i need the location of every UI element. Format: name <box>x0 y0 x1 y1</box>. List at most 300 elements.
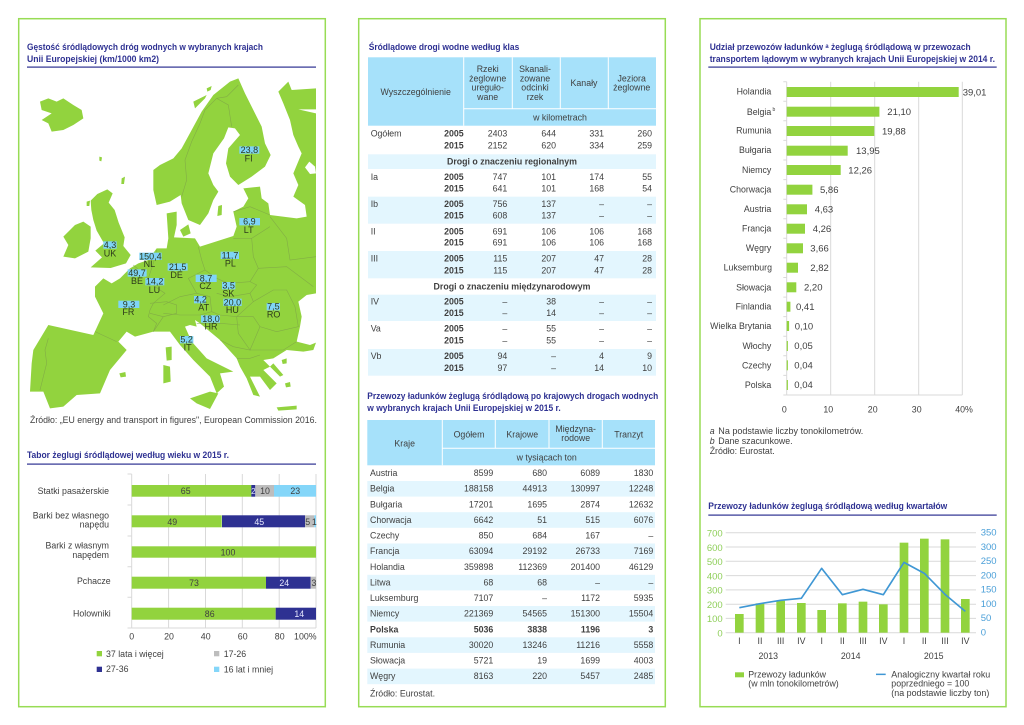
chart: fleet age stacked bars: napędu <box>80 520 109 530</box>
map values: RO <box>267 310 280 320</box>
map values: 49,7 <box>128 268 146 278</box>
chart: share by country bars: 12,26 <box>848 166 872 176</box>
table: freight by country: Krajowe <box>506 429 538 439</box>
chart: quarterly freight bars and line: I <box>820 636 823 646</box>
table: waterways by class: 691 <box>493 226 507 236</box>
table: freight by country: 2485 <box>634 671 653 681</box>
chart: share by country bars: 3,66 <box>810 244 829 255</box>
table: waterways by class: – <box>647 336 652 346</box>
chart: quarterly freight bars and line: 400 <box>707 571 723 582</box>
chart: fleet age stacked bars: 1 <box>312 517 317 527</box>
table: waterways by class: 207 <box>541 265 556 275</box>
table: freight by country: Luksemburg <box>370 593 419 603</box>
map values: 23,8 <box>241 145 258 155</box>
table: waterways by class: wane <box>476 92 498 102</box>
chart: share by country bars: 0,10 <box>795 321 813 332</box>
chart: share by country bars: 5,86 <box>820 185 838 196</box>
table: freight by country: – <box>648 577 653 587</box>
table: waterways by class: 97 <box>498 363 507 373</box>
chart: share by country bars: 39,01 <box>963 88 986 98</box>
chart: quarterly freight bars and line: III <box>777 636 784 646</box>
table: freight by country: 7169 <box>634 546 653 556</box>
table: freight by country: Bułgaria <box>370 499 402 509</box>
table: freight by country: 850 <box>479 530 493 540</box>
table: freight by country: Kraje <box>394 438 415 448</box>
table: waterways by class: – <box>599 308 604 318</box>
chart: share by country bars: 2,20 <box>804 283 822 294</box>
map: Europe with density values <box>30 78 316 411</box>
chart: fleet age stacked bars: 14 <box>294 609 304 619</box>
table: waterways by class: 2015 <box>444 141 464 151</box>
legend: fleet age <box>97 649 273 674</box>
table: freight by country: 5935 <box>634 593 653 603</box>
table: waterways by class: Ogółem <box>371 129 402 139</box>
table: freight by country: 13246 <box>523 640 547 650</box>
legend: quarterly chart: Analogiczny kwartał roku <box>891 669 990 679</box>
table: freight by country: Międzyna- <box>555 424 596 434</box>
table: waterways by class: – <box>502 324 507 334</box>
chart: quarterly freight bars and line: 500 <box>707 557 723 568</box>
chart: share by country bars: 21,10 <box>887 107 911 118</box>
table: waterways by class: III <box>371 254 378 264</box>
map values <box>103 145 280 352</box>
chart: quarterly freight bars and line: II <box>758 636 762 646</box>
panel: left column <box>19 19 325 707</box>
table: waterways by class: 2403 <box>488 129 507 139</box>
table: freight by country: 11216 <box>576 640 600 650</box>
table: waterways by class: 2005 <box>444 199 464 209</box>
table: freight by country: Holandia <box>370 562 405 572</box>
table: freight by country: 5457 <box>580 671 600 681</box>
table: waterways by class: – <box>647 324 652 334</box>
heading: freight by country: Przewozy ładunków żeglugą śródlądową po krajowych drogach wodnych <box>367 391 658 401</box>
table: freight by country: 6642 <box>474 515 493 525</box>
table: waterways by class: – <box>502 336 507 346</box>
table: waterways by class: 174 <box>589 172 604 182</box>
table: freight by country: 359898 <box>464 562 493 572</box>
heading: waterway density map <box>27 42 316 68</box>
table: waterways by class: Ia <box>371 172 378 182</box>
table: freight by country: Litwa <box>370 577 391 587</box>
chart: quarterly freight bars and line: 50 <box>981 613 991 624</box>
chart: quarterly freight bars and line: III <box>859 636 867 646</box>
chart: fleet age stacked bars: 65 <box>181 486 191 496</box>
table: waterways by class: 644 <box>541 129 556 139</box>
table: freight by country: 51 <box>537 515 547 525</box>
table: waterways by class: 641 <box>493 184 507 194</box>
map values: 4,2 <box>194 295 207 305</box>
table: waterways by class: odcinki <box>521 82 549 92</box>
chart: share by country bars: 2,82 <box>810 263 829 274</box>
map values: 14,2 <box>146 277 163 287</box>
chart: quarterly freight bars and line: I <box>903 636 905 646</box>
legend: quarterly chart: (na podstawie liczby ton) <box>891 688 989 698</box>
table: freight by country: 3 <box>648 624 653 634</box>
table: freight by country: 8599 <box>474 468 493 478</box>
chart: share by country bars: Chorwacja <box>730 184 771 194</box>
legend: quarterly chart: (w mln tonokilometrów) <box>748 679 839 689</box>
table: freight by country: 29192 <box>523 546 547 556</box>
table: freight by country: Polska <box>370 624 398 634</box>
table: freight by country: 7107 <box>474 593 493 603</box>
table: waterways by class: – <box>551 363 556 373</box>
table: waterways by class: 106 <box>541 238 556 248</box>
chart: share by country bars: 4,26 <box>813 224 831 235</box>
chart: quarterly freight bars and line: II <box>922 636 927 646</box>
text: table source: Źródło: Eurostat. <box>370 688 435 698</box>
table: waterways by class: 9 <box>647 351 652 361</box>
chart: quarterly freight bars and line <box>707 528 997 661</box>
table: waterways by class: 2015 <box>444 210 464 220</box>
map values: UK <box>104 248 116 258</box>
heading: share of inland shipping <box>708 42 997 68</box>
map values: IT <box>184 342 192 352</box>
table: freight by country: 17201 <box>469 499 493 509</box>
chart: share by country bars: Czechy <box>742 360 772 370</box>
legend: fleet age: 27-36 <box>106 664 129 674</box>
chart: fleet age stacked bars: 100% <box>294 632 317 642</box>
table: waterways by class: 28 <box>642 265 652 275</box>
chart: share by country bars: 40% <box>955 404 973 414</box>
table: waterways by class: Va <box>371 324 381 334</box>
map values: 9,3 <box>123 299 135 309</box>
table: freight by country: 201400 <box>571 562 600 572</box>
table: freight by country: 12248 <box>629 484 653 494</box>
chart: quarterly freight bars and line: IV <box>961 636 970 646</box>
table: freight by country: 5721 <box>474 656 493 666</box>
chart: share by country bars: 13,95 <box>856 146 880 157</box>
table: waterways by class: Ib <box>371 199 378 209</box>
table: freight by country: 188158 <box>464 484 493 494</box>
table: freight by country: 4003 <box>634 656 653 666</box>
chart: fleet age stacked bars: Holowniki <box>73 608 111 618</box>
table: waterways by class: 55 <box>546 324 556 334</box>
chart: quarterly freight bars and line: 350 <box>981 528 997 538</box>
chart: quarterly freight bars and line: IV <box>879 636 888 646</box>
table: waterways by class: 608 <box>493 210 507 220</box>
table: waterways by class: 2152 <box>488 141 507 151</box>
chart: share by country bars: b <box>772 107 776 113</box>
table: waterways by class: Rzeki <box>477 64 499 74</box>
chart: fleet age stacked bars: 80 <box>275 632 285 642</box>
map values: 4,3 <box>104 240 116 250</box>
table: waterways by class: – <box>647 199 652 209</box>
table: waterways by class: 620 <box>541 141 556 151</box>
chart: quarterly freight bars and line: 0 <box>981 628 986 638</box>
map values: PL <box>225 258 236 268</box>
chart: quarterly freight bars and line: 200 <box>707 600 723 611</box>
chart: quarterly freight bars and line: I <box>738 636 741 646</box>
table: waterways by class: Wyszczególnienie <box>381 87 451 97</box>
table: waterways by class: 137 <box>541 210 556 220</box>
heading: waterway density map: Unii Europejskiej (km/1000 km2) <box>27 54 159 64</box>
panel: right column <box>700 19 1006 707</box>
chart: fleet age stacked bars: napędem <box>72 550 109 560</box>
chart: share by country bars: 4,63 <box>815 205 833 216</box>
table: waterways by class: – <box>599 336 604 346</box>
table: freight by country: Austria <box>370 468 397 478</box>
map values: DE <box>170 270 183 280</box>
table: waterways by class: – <box>647 308 652 318</box>
table: waterways by class: – <box>599 324 604 334</box>
table: waterways by class: 137 <box>541 199 556 209</box>
text: chart notes: Źródło: Eurostat. <box>710 446 775 456</box>
table: waterways by class: 168 <box>589 184 604 194</box>
text: chart notes <box>710 426 863 456</box>
map values: LT <box>244 225 254 235</box>
chart: share by country bars: 10 <box>823 404 833 414</box>
table: freight by country: 68 <box>484 577 493 587</box>
table: freight by country: 1695 <box>527 499 547 509</box>
chart: fleet age stacked bars: Statki pasażerskie <box>38 486 109 496</box>
table: waterways by class: Drogi o znaczeniu regionalnym <box>447 156 577 166</box>
table: freight by country: Chorwacja <box>370 515 412 525</box>
map values: 150,4 <box>139 251 162 261</box>
table: freight by country: 1172 <box>581 593 600 603</box>
table: waterways by class: 691 <box>493 238 507 248</box>
chart: share by country bars: 0,04 <box>794 360 813 371</box>
heading: freight by quarter: Przewozy ładunków żeglugą śródlądową według kwartałów <box>708 501 948 511</box>
table: freight by country: – <box>595 577 600 587</box>
table: waterways by class: 14 <box>594 363 604 373</box>
table: freight by country: 6076 <box>634 515 653 525</box>
legend: fleet age: 16 lat i mniej <box>224 664 273 674</box>
map values: FR <box>122 307 135 317</box>
table: freight by country: 2874 <box>580 499 600 509</box>
chart: share by country bars: 30 <box>912 404 922 414</box>
table: waterways by class: 259 <box>637 141 652 151</box>
table: waterways by class: Jeziora <box>618 73 646 83</box>
table: freight by country: 221369 <box>464 609 493 619</box>
table: freight by country: 19 <box>537 656 547 666</box>
heading: share of inland shipping: transportem lądowym w wybranych krajach Unii Europejskiej w 2014 r. <box>710 54 995 64</box>
legend: quarterly chart: poprzedniego = 100 <box>891 679 969 689</box>
table: waterways by class: 28 <box>642 254 652 264</box>
chart: share by country bars: Holandia <box>737 86 771 96</box>
table: waterways by class: 94 <box>498 351 507 361</box>
table: freight by country: 515 <box>585 515 600 525</box>
legend: fleet age: 37 lata i więcej <box>106 649 164 659</box>
chart: quarterly freight bars and line: 2014 <box>841 651 861 661</box>
text: chart notes: b <box>710 436 715 446</box>
map values: AT <box>198 303 210 313</box>
map values: 11,7 <box>222 250 238 260</box>
legend: quarterly chart: Przewozy ładunków <box>748 669 827 679</box>
table: freight by country: Tranzyt <box>614 429 644 439</box>
table: waterways by class: 2005 <box>444 129 464 139</box>
chart: fleet age stacked bars: 73 <box>189 578 199 588</box>
table: freight by country: 12632 <box>629 499 653 509</box>
table: freight by country: – <box>648 530 653 540</box>
table: waterways by class: 47 <box>594 254 604 264</box>
table: waterways by class: – <box>551 351 556 361</box>
table: freight by country: 30020 <box>469 640 493 650</box>
table: freight by country: Francja <box>370 546 399 556</box>
table: freight by country: 684 <box>532 530 547 540</box>
table: waterways by class: 2005 <box>444 172 464 182</box>
table: waterways by class: 106 <box>541 226 556 236</box>
table: waterways by class: 756 <box>493 199 507 209</box>
chart: share by country bars: Słowacja <box>736 282 771 292</box>
table: waterways by class: 115 <box>493 254 507 264</box>
map values: 6,9 <box>243 217 256 227</box>
table: waterways by class: 2005 <box>444 351 464 361</box>
table: waterways by class: 47 <box>594 265 604 275</box>
table: freight by country: 1830 <box>634 468 653 478</box>
map values: HU <box>226 305 239 315</box>
text: chart notes: a <box>710 426 715 436</box>
table: waterways by class: Vb <box>371 351 382 361</box>
table: waterways by class: 10 <box>642 363 652 373</box>
chart: fleet age stacked bars: 10 <box>260 486 270 496</box>
table: waterways by class: Kanały <box>571 78 598 88</box>
map values: 20,0 <box>224 297 241 307</box>
chart: fleet age stacked bars: Barki z własnym <box>45 541 109 551</box>
table: freight by country: 130997 <box>571 484 600 494</box>
table: waterways by class: 106 <box>589 238 604 248</box>
table: freight by country: 3838 <box>527 624 547 634</box>
table: waterways by class: 14 <box>546 308 556 318</box>
table: waterways by class: – <box>502 308 507 318</box>
map values: 21,5 <box>169 262 186 272</box>
chart: fleet age stacked bars: 100 <box>221 548 235 558</box>
table: freight by country: 1196 <box>581 624 600 634</box>
table: waterways by class: zowane <box>520 73 550 83</box>
table: freight by country: 1699 <box>580 656 600 666</box>
table: freight by country: 63094 <box>469 546 493 556</box>
table: freight by country: 15504 <box>629 609 653 619</box>
map values: NL <box>144 259 155 269</box>
table: freight by country: Słowacja <box>370 656 405 666</box>
table: waterways by class: 2005 <box>444 296 464 306</box>
chart: fleet age stacked bars: Barki bez własnego <box>33 511 109 521</box>
chart: share by country bars: 19,88 <box>882 126 906 138</box>
table: waterways by class: – <box>647 210 652 220</box>
table: waterways by class: – <box>599 210 604 220</box>
table: freight by country: 46129 <box>629 562 653 572</box>
chart: fleet age stacked bars: 20 <box>164 632 174 642</box>
table: freight by country: 112369 <box>518 562 547 572</box>
chart: share by country bars: Wielka Brytania <box>710 321 771 331</box>
chart: fleet age stacked bars <box>33 474 317 642</box>
table: waterways by class: 2015 <box>444 336 464 346</box>
chart: quarterly freight bars and line: II <box>840 636 845 646</box>
chart: fleet age stacked bars: 49 <box>167 517 177 527</box>
table: waterways by class: 331 <box>589 129 604 139</box>
chart: quarterly freight bars and line: 300 <box>707 586 723 597</box>
table: freight by country: 5036 <box>474 624 493 634</box>
table: freight by country: 680 <box>532 468 547 478</box>
heading: freight by country <box>366 391 658 413</box>
table: freight by country: rodowe <box>561 433 590 443</box>
table: waterways by class: Drogi o znaczeniu międzynarodowym <box>434 282 591 292</box>
table: freight by country: 6089 <box>580 468 600 478</box>
table: waterways by class: 115 <box>493 265 507 275</box>
chart: share by country bars: Rumunia <box>736 126 771 136</box>
chart: share by country bars: Bułgaria <box>739 145 771 155</box>
chart: share by country bars: 0,05 <box>794 341 813 352</box>
heading: share of inland shipping: Udział przewozów ładunków ᵃ żeglugą śródlądową w przewozach <box>710 42 971 52</box>
table: waterways by class: 334 <box>589 141 604 151</box>
chart: fleet age stacked bars: 5 <box>305 517 310 527</box>
table: freight by country: Ogółem <box>454 429 484 439</box>
chart: quarterly freight bars and line: 300 <box>981 542 997 553</box>
chart: quarterly freight bars and line: IV <box>797 636 806 646</box>
table: waterways by class: 207 <box>541 254 556 264</box>
table: waterways by class: 55 <box>642 172 652 182</box>
chart: share by country bars: 20 <box>868 404 878 414</box>
chart: fleet age stacked bars: 23 <box>290 486 300 496</box>
chart: fleet age stacked bars: 45 <box>254 517 264 527</box>
table: waterways by class: 106 <box>589 226 604 236</box>
chart: share by country bars: Belgia <box>747 107 771 117</box>
table: waterways by class: 54 <box>642 184 652 194</box>
table: freight by country: Niemcy <box>370 609 400 619</box>
chart: share by country bars: 0,41 <box>796 302 814 313</box>
map values: SK <box>222 288 234 298</box>
chart: fleet age stacked bars: 40 <box>201 632 211 642</box>
table: waterways by class: 101 <box>541 184 556 194</box>
table: waterways by class: 168 <box>637 238 652 248</box>
table: waterways by class: rzek <box>527 92 544 102</box>
table: waterways by class: 168 <box>637 226 652 236</box>
map values: HR <box>205 322 218 332</box>
table: waterways by class: 2015 <box>444 184 464 194</box>
chart: quarterly freight bars and line: 600 <box>707 543 723 554</box>
chart: quarterly freight bars and line: 100 <box>981 599 997 610</box>
table: waterways by class: Skanali- <box>519 64 551 74</box>
table: waterways by class: 101 <box>541 172 556 182</box>
chart: share by country bars: Francja <box>742 224 771 234</box>
chart: share by country bars: 0 <box>782 404 787 414</box>
table: freight by country: 68 <box>537 577 547 587</box>
table: waterways by class: 2005 <box>444 254 464 264</box>
chart: fleet age stacked bars: 0 <box>129 632 134 642</box>
table: freight by country: Czechy <box>370 530 400 540</box>
table: freight by country: 44913 <box>523 484 547 494</box>
chart: quarterly freight bars and line: 700 <box>707 528 723 540</box>
map values: 3,5 <box>222 281 235 291</box>
chart: share by country bars: Finlandia <box>736 302 771 312</box>
map values: BE <box>131 276 143 286</box>
table: freight by country: 54565 <box>523 609 547 619</box>
table: waterways by class: 4 <box>599 351 604 361</box>
heading: waterway density map: Gęstość śródlądowych dróg wodnych w wybranych krajach <box>27 42 263 52</box>
map values: 7,5 <box>267 302 280 312</box>
legend: fleet age: 17-26 <box>224 649 246 659</box>
table: freight by country: 167 <box>585 530 600 540</box>
chart: fleet age stacked bars: 24 <box>279 578 289 588</box>
table: waterways by class: II <box>371 226 376 236</box>
chart: quarterly freight bars and line: 0 <box>717 628 723 640</box>
table: waterways by class: 2015 <box>444 363 464 373</box>
table: waterways by class: 2005 <box>444 324 464 334</box>
table: freight by country: Rumunia <box>370 640 405 650</box>
heading: waterways by class: Śródlądowe drogi wodne według klas <box>369 41 519 52</box>
chart: fleet age stacked bars: 2 <box>251 487 256 496</box>
table: waterways by class: 55 <box>546 336 556 346</box>
chart: fleet age stacked bars: Pchacze <box>77 576 111 586</box>
chart: share by country bars: 0,04 <box>794 380 813 391</box>
chart: quarterly freight bars and line: 200 <box>981 570 997 581</box>
table: waterways by class: 747 <box>493 172 507 182</box>
chart: share by country bars: Węgry <box>746 243 772 253</box>
text: chart notes: Na podstawie liczby tonokilometrów. <box>718 426 863 436</box>
table: waterways by class: 38 <box>546 296 556 306</box>
panel: middle column <box>359 19 665 707</box>
map values: LU <box>149 285 160 295</box>
table: freight by country: 5558 <box>634 640 653 650</box>
